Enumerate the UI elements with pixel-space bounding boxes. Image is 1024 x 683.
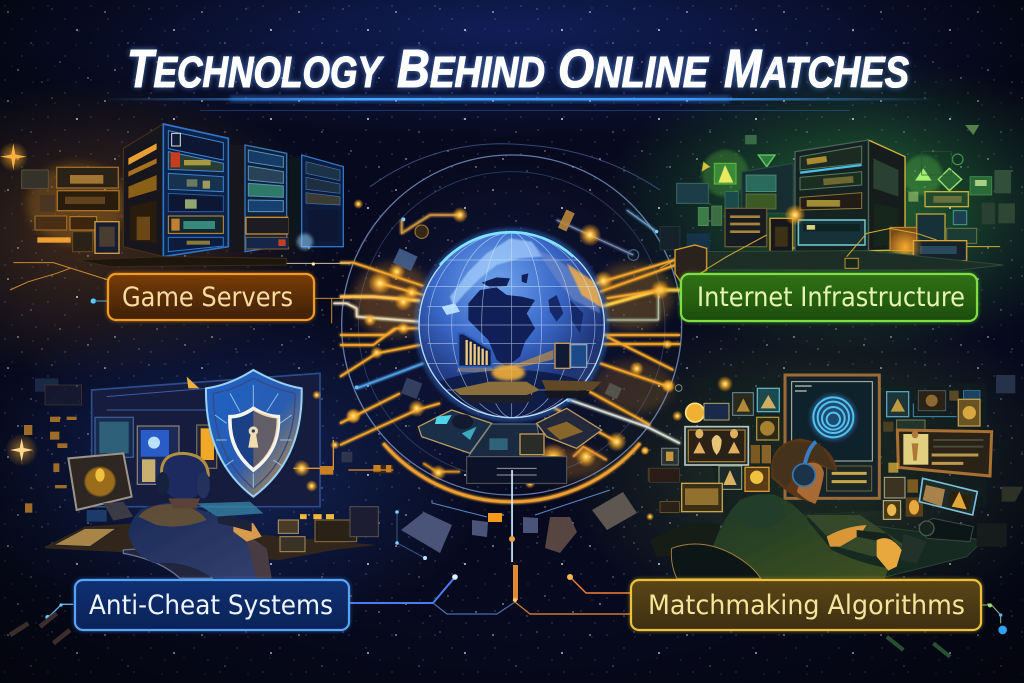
server rack 2 bbox=[230, 145, 289, 252]
label: game servers bbox=[107, 273, 315, 321]
network wires: right bbox=[533, 210, 683, 460]
gamer and chair bbox=[123, 453, 272, 578]
label: internet infrastructure: Internet Infrastructure bbox=[697, 282, 965, 313]
main rack bbox=[795, 140, 905, 252]
label: matchmaking algorithms: Matchmaking Algorithms bbox=[648, 590, 965, 621]
title bbox=[127, 39, 909, 99]
gamer and chair bbox=[671, 438, 902, 578]
control consoles bbox=[418, 408, 602, 483]
connector wires at bottom center bbox=[350, 470, 630, 614]
title: ONLINE bbox=[558, 39, 709, 99]
desk gadgets bbox=[278, 390, 393, 552]
green icons bbox=[702, 125, 1015, 224]
left monitor bbox=[68, 453, 133, 521]
infrastructure desk and wires bbox=[658, 228, 1003, 294]
label: internet infrastructure bbox=[680, 273, 978, 322]
right units and glow bbox=[784, 192, 977, 266]
panel: matchmaking scene bbox=[641, 375, 1023, 657]
label: anti-cheat systems: Anti-Cheat Systems bbox=[89, 590, 333, 621]
glow nodes and wires bbox=[641, 375, 1023, 657]
wire nodes bbox=[346, 199, 683, 489]
title underline bbox=[100, 96, 940, 111]
large fingerprint monitor bbox=[785, 375, 879, 498]
holographic chart panels bbox=[458, 333, 587, 368]
panel: lower hub panels and network bbox=[395, 490, 637, 560]
floating data panels bbox=[22, 163, 127, 253]
back wall frame bbox=[92, 373, 320, 507]
wires to the label bbox=[10, 603, 73, 643]
desk with keyboard bbox=[45, 502, 377, 560]
right screens bbox=[883, 391, 992, 519]
globe bbox=[412, 226, 611, 424]
side screen wall bbox=[649, 377, 987, 517]
left data column bbox=[24, 378, 82, 513]
label: matchmaking algorithms bbox=[630, 579, 982, 631]
network wires: left bbox=[333, 215, 460, 472]
side screens bbox=[660, 163, 793, 252]
globe graticule bbox=[419, 232, 604, 418]
shield with keyhole bbox=[206, 370, 302, 497]
matchmaking desk bbox=[650, 515, 1007, 577]
warm star flare bbox=[0, 142, 28, 172]
central platform bbox=[453, 365, 602, 403]
server desk and traces bbox=[10, 257, 350, 323]
label: anti-cheat systems bbox=[74, 579, 350, 631]
landmasses bbox=[450, 238, 543, 307]
title: MATCHES bbox=[724, 39, 909, 99]
floating small panels bbox=[342, 209, 678, 481]
amber haze behind wires bbox=[353, 263, 673, 480]
server rack 1 bbox=[123, 124, 228, 257]
title: BEHIND bbox=[397, 39, 545, 99]
panel: anti-cheat scene bbox=[5, 370, 393, 643]
outer orbit rings bbox=[342, 144, 682, 502]
label: game servers: Game Servers bbox=[122, 282, 293, 313]
star flare bbox=[5, 433, 38, 467]
panel: internet infrastructure scene bbox=[658, 125, 1015, 294]
panel: game servers scene bbox=[0, 124, 350, 323]
server rack 3 bbox=[288, 155, 343, 250]
title: TECHNOLOGY bbox=[127, 39, 384, 99]
panel: central globe hub with network bbox=[333, 144, 683, 502]
